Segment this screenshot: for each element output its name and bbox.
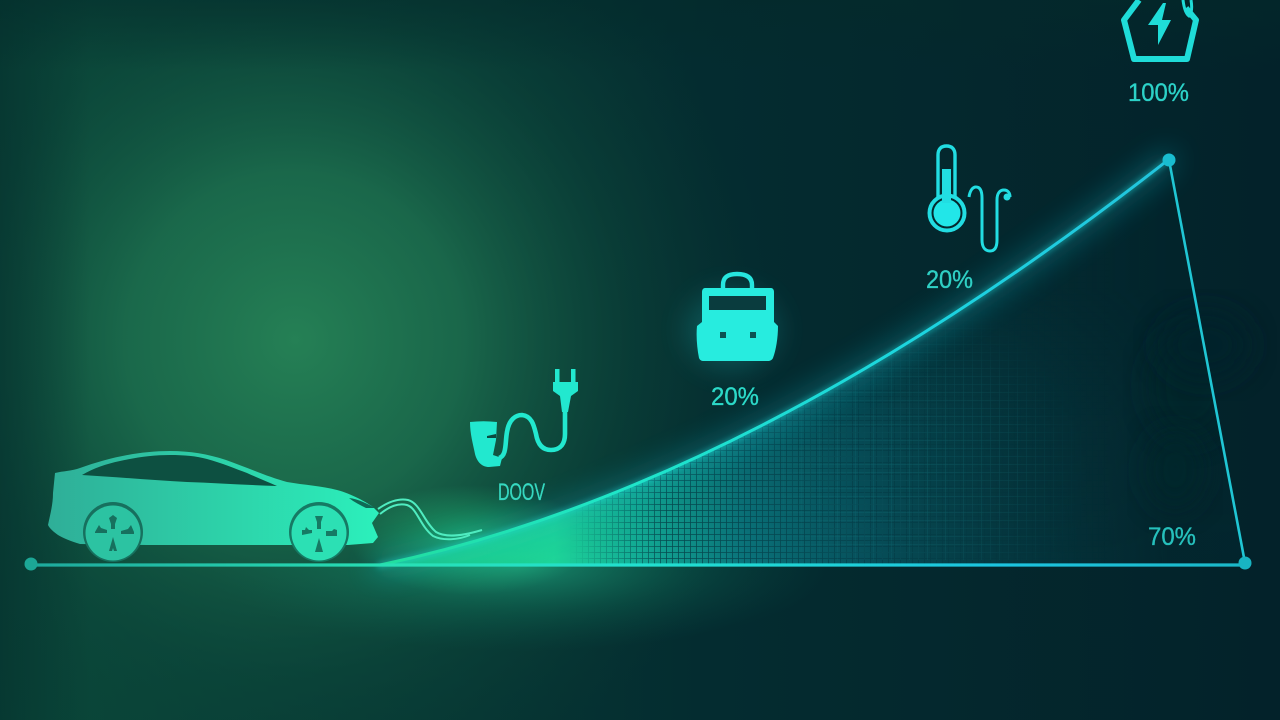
icon: plug and cable: [470, 369, 578, 467]
charging curve: [380, 160, 1168, 565]
front wheel: [289, 502, 349, 562]
label: 100%: 100%: [1128, 79, 1189, 107]
car silhouette: [48, 451, 482, 562]
glow around cable end: [350, 485, 590, 595]
icon: thermometer with coil: [930, 146, 1010, 251]
area under the charging curve: [394, 312, 1114, 564]
car headlight: [349, 498, 375, 508]
charging cable from car: [378, 499, 482, 539]
baseline axis: [24, 556, 1252, 570]
icon: battery pack: [686, 274, 778, 370]
label: 70%: 70%: [1148, 523, 1196, 551]
car window: [82, 455, 277, 486]
label: 20% battery: 20%: [711, 383, 759, 411]
glow below the baseline: [310, 566, 771, 632]
label: 20% temperature: 20%: [926, 266, 973, 294]
rear wheel: [83, 502, 143, 562]
curve peak dot: [1162, 154, 1176, 166]
label: DOOV: DOOV: [498, 479, 545, 506]
right descending line: [1169, 160, 1245, 563]
icon: battery with lightning bolt: [1124, 0, 1196, 59]
